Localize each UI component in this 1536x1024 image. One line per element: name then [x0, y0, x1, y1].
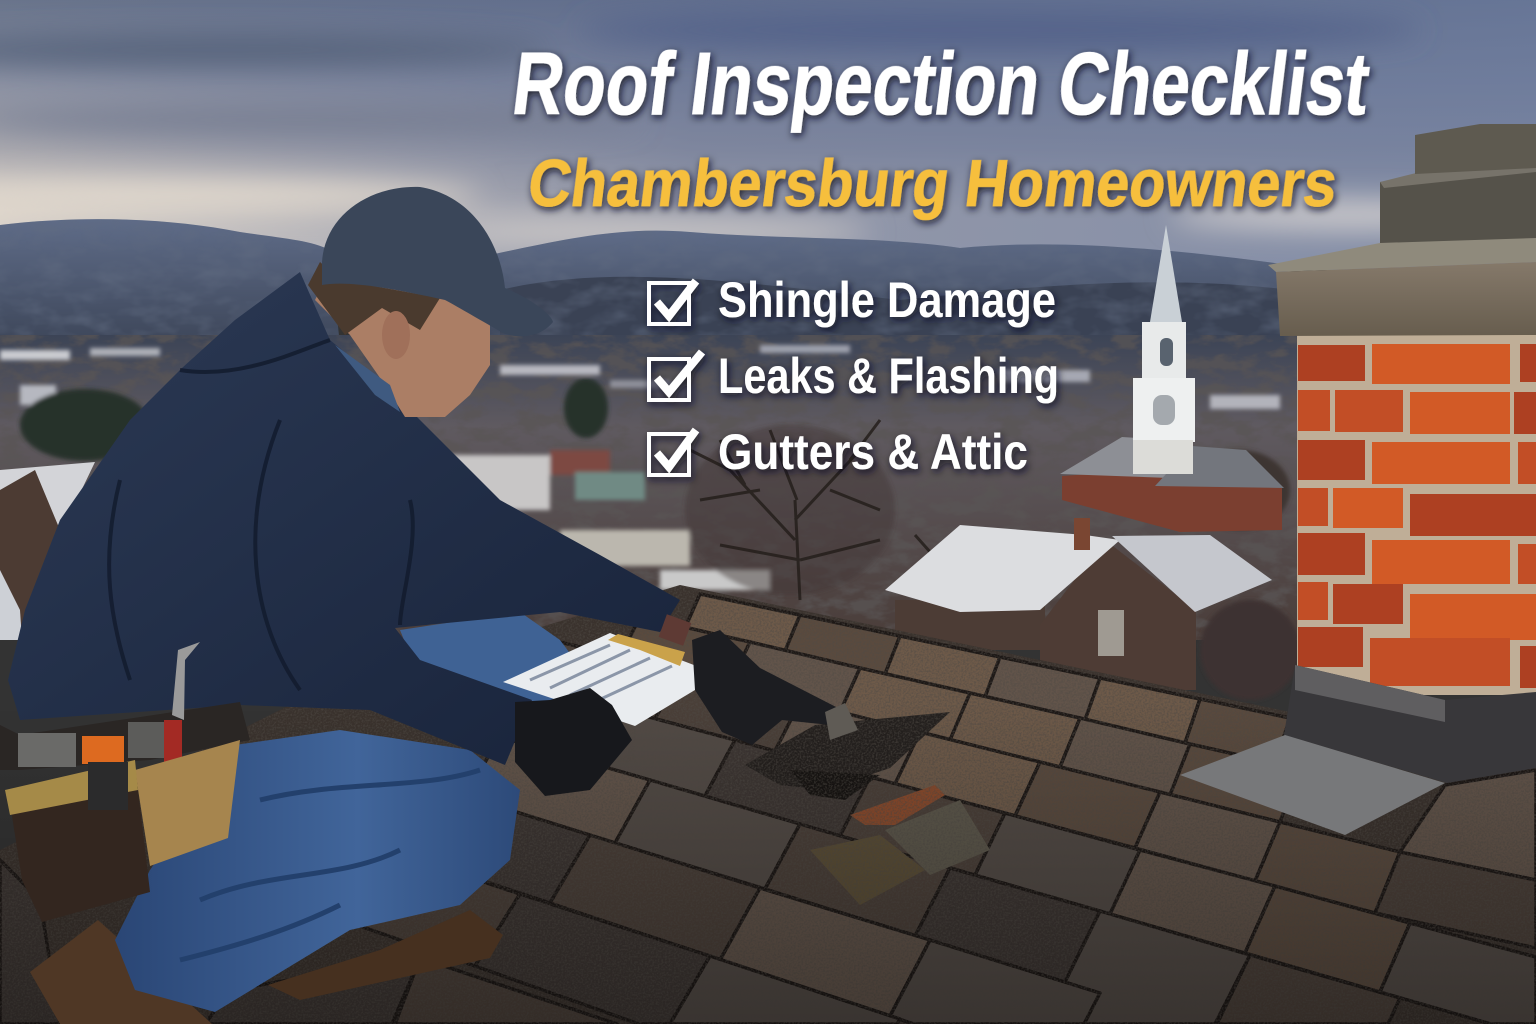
snow-roofed house	[885, 518, 1272, 690]
item: leaks and flashing: Leaks & Flashing	[718, 348, 1059, 404]
metal step flashing	[1180, 665, 1536, 835]
town in the valley	[0, 335, 1300, 700]
roof granule texture	[0, 585, 1536, 1024]
church with steeple	[1060, 225, 1284, 532]
left foreground house	[0, 462, 95, 640]
shingle rows	[0, 594, 1536, 1024]
ear	[382, 311, 410, 359]
clipboard with inspection form	[503, 633, 720, 726]
hair behind ear	[308, 262, 440, 335]
chimney	[1180, 124, 1536, 835]
item: shingle damage: Shingle Damage	[718, 272, 1056, 328]
mountain forest texture	[10, 219, 1280, 335]
shingled roof	[0, 585, 1536, 1024]
face and neck	[315, 270, 490, 417]
item: gutters and attic: Gutters & Attic	[718, 424, 1028, 480]
boots	[30, 910, 503, 1024]
roof inspector	[0, 187, 858, 1024]
damaged shingle patch	[745, 712, 990, 905]
jeans	[115, 612, 590, 1012]
subtitle: Chambersburg Homeowners	[524, 147, 1341, 221]
cap	[322, 187, 553, 336]
gloved hands	[515, 614, 858, 796]
sky background	[0, 0, 1536, 270]
checklist	[649, 272, 1059, 480]
jacket folds	[109, 340, 413, 690]
brick body	[1297, 335, 1536, 695]
jacket	[8, 272, 680, 765]
bare tree	[690, 420, 1000, 630]
distant mountains	[0, 219, 1300, 345]
tool belt	[0, 642, 250, 922]
concrete cap	[1268, 124, 1536, 336]
collar	[335, 345, 400, 412]
